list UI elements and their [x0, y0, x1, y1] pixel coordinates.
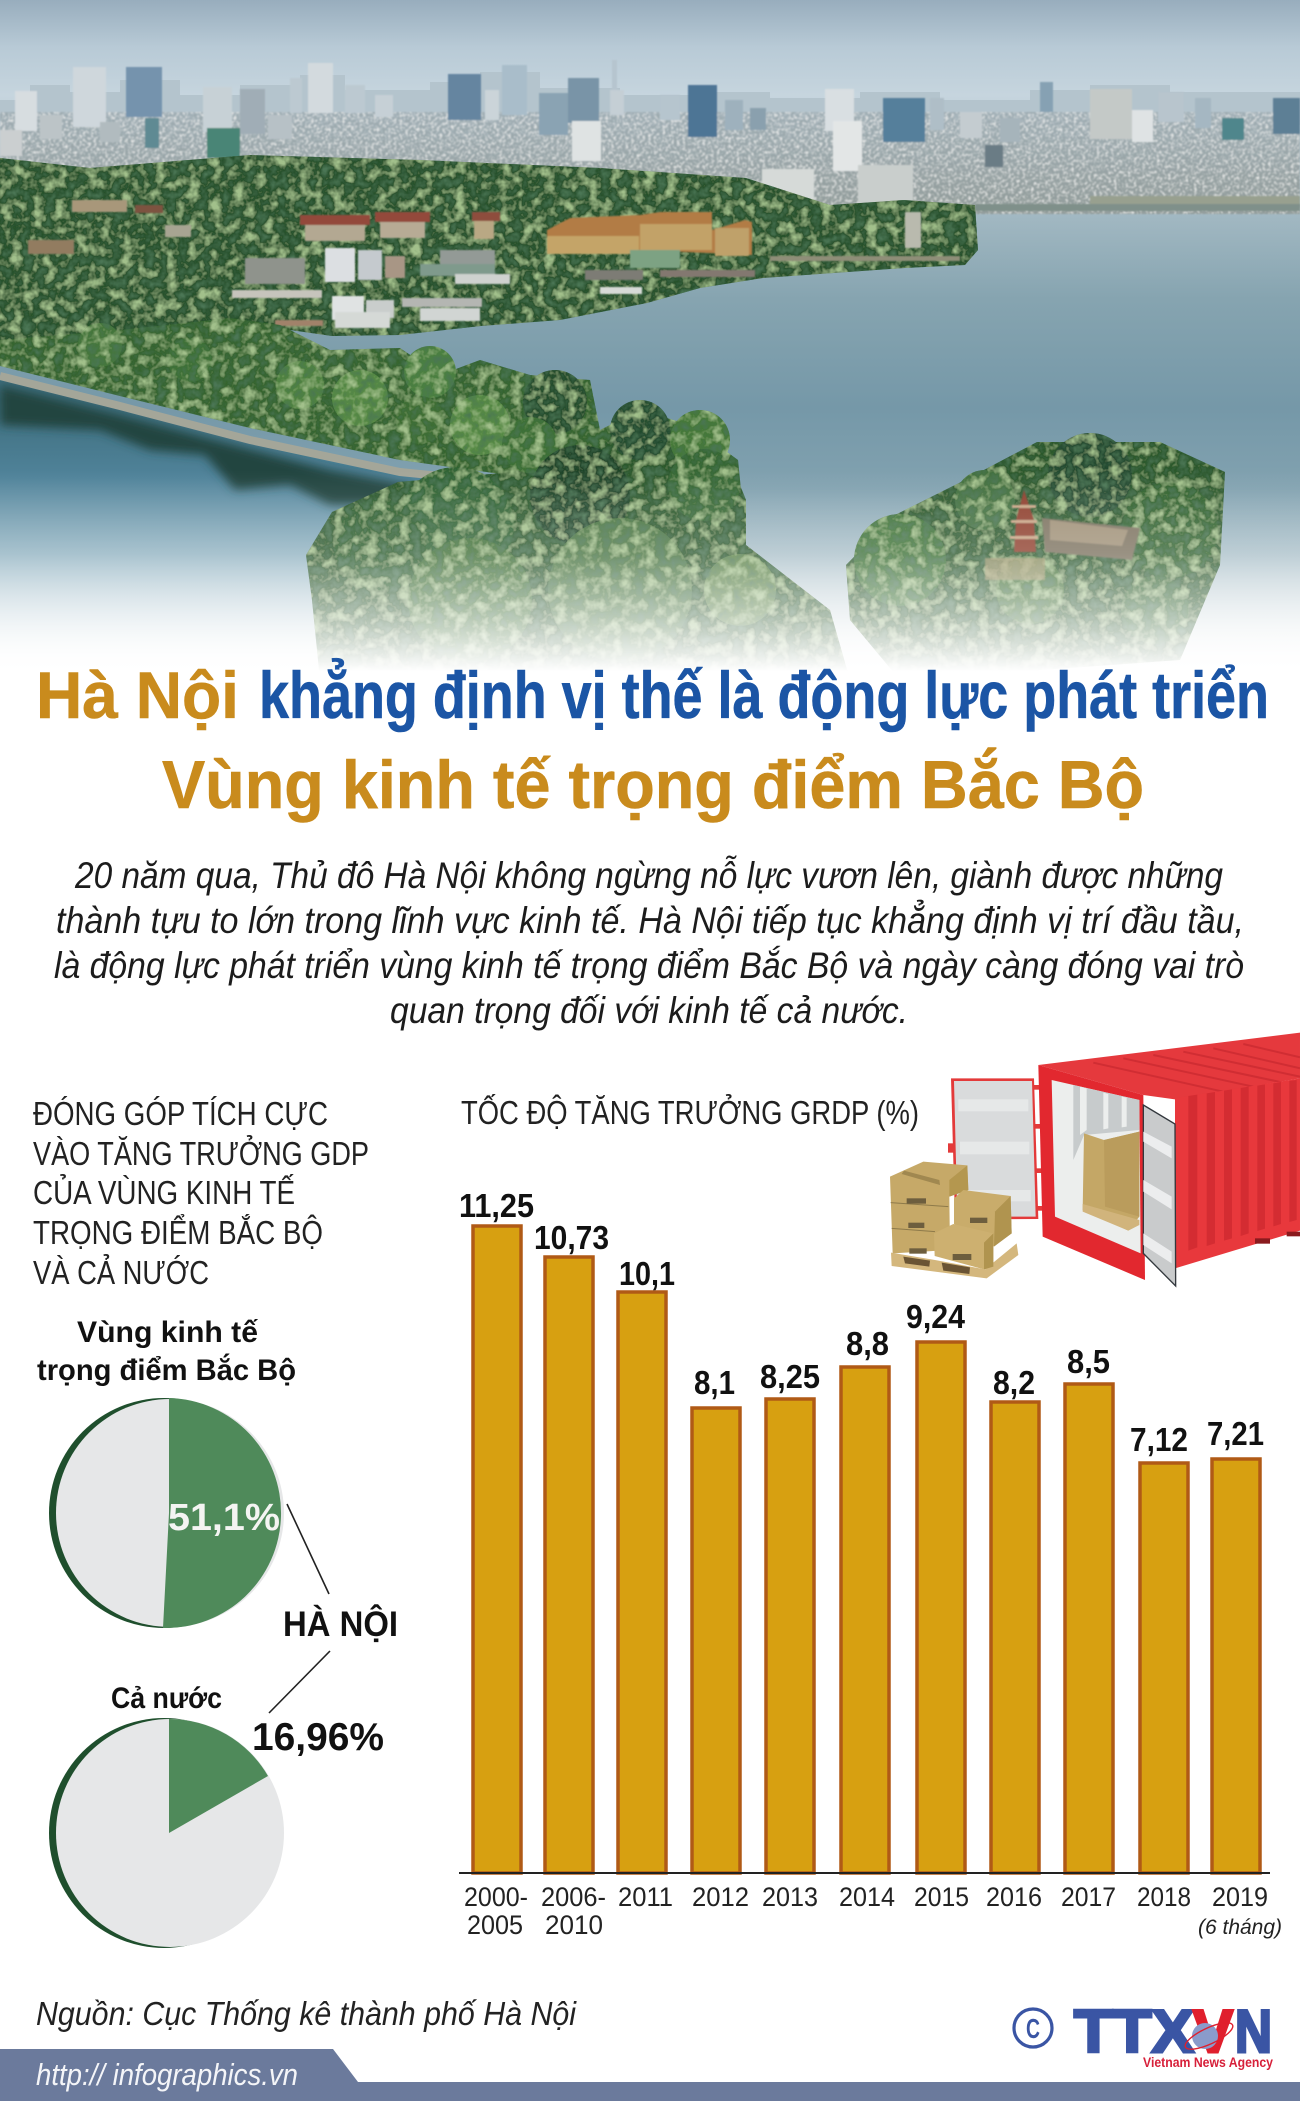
year labels [464, 1882, 1282, 1940]
bar values: 9,24 [906, 1298, 966, 1335]
callout: Hanoi [269, 1504, 398, 1713]
bar values: 7,21 [1207, 1415, 1264, 1452]
year labels: 2012 [692, 1882, 749, 1912]
heading: GDP contribution: VÀ CẢ NƯỚC [33, 1254, 209, 1291]
year labels: 2005 [467, 1910, 523, 1940]
title line 2: Vùng kinh tế trọng điểm Bắc Bộ [162, 746, 1144, 823]
year labels: 2011 [618, 1882, 673, 1912]
intro paragraph: quan trọng đối với kinh tế cả nước. [390, 990, 908, 1031]
tree reflection in water [0, 385, 415, 520]
container front frame [1038, 1065, 1145, 1280]
heading: GDP contribution: TRỌNG ĐIỂM BẮC BỘ [33, 1214, 323, 1251]
bar values: 11,25 [459, 1187, 534, 1224]
pie label [37, 1316, 296, 1387]
icon: copyright [1014, 2009, 1052, 2047]
open right door [1143, 1105, 1176, 1286]
bar values: 8,25 [760, 1358, 820, 1395]
pie chart: whole country [49, 1682, 384, 1948]
bar values: 8,1 [694, 1364, 735, 1401]
causeway road [0, 372, 434, 478]
title [36, 657, 1269, 823]
year labels: 2016 [986, 1882, 1042, 1912]
white fade at the bottom of the photo [0, 470, 1300, 680]
hazy distant towers [0, 72, 1300, 112]
side wall ridges [1188, 1080, 1300, 1251]
year labels: (6 tháng) [1198, 1916, 1282, 1939]
pie body [49, 1398, 284, 1628]
icon: globe with orbit [1182, 2018, 1236, 2054]
heading: GDP contribution: CỦA VÙNG KINH TẾ [33, 1174, 295, 1211]
tagline: Vietnam News Agency [1143, 2054, 1273, 2070]
year labels: 2013 [762, 1882, 818, 1912]
pie label: trọng điểm Bắc Bộ [37, 1353, 296, 1387]
icon: copyright: C [1026, 2013, 1040, 2044]
year labels: 2014 [839, 1882, 895, 1912]
container interior [1052, 1080, 1141, 1253]
heading: GDP contribution [33, 1095, 369, 1291]
year labels: 2010 [545, 1910, 603, 1940]
forest on far bank [0, 155, 978, 360]
pallet of cardboard boxes [890, 1162, 1018, 1278]
intro paragraph [54, 855, 1244, 1031]
sky and lake backdrop [0, 0, 1300, 680]
pie label: Vùng kinh tế [77, 1316, 258, 1349]
source note: Nguồn: Cục Thống kê thành phố Hà Nội [36, 1995, 578, 2032]
wordmark: N [1235, 1998, 1272, 2065]
lake far shoreline [975, 204, 1300, 211]
callout: Hanoi: HÀ NỘI [283, 1604, 398, 1644]
photo: West Lake, Hanoi [0, 0, 1300, 680]
year labels: 2019 [1212, 1882, 1268, 1912]
year labels: 2000- [464, 1882, 528, 1912]
footer bar [0, 2049, 1300, 2101]
year labels: 2018 [1137, 1882, 1191, 1912]
title line 1: Hà Nội [36, 658, 239, 732]
wordmark: TTX [1074, 1998, 1194, 2065]
heading: GRDP growth: TỐC ĐỘ TĂNG TRƯỞNG GRDP (%) [461, 1093, 919, 1131]
tree-lined peninsula and island [0, 318, 850, 680]
bar values: 10,73 [534, 1219, 609, 1256]
wordmark [1074, 1998, 1272, 2065]
container roof [1038, 1033, 1300, 1099]
temple island [846, 433, 1225, 680]
bars [473, 1226, 1260, 1873]
wordmark: V [1193, 1998, 1233, 2065]
pagoda and temple [985, 490, 1140, 580]
container side wall [1175, 1078, 1300, 1268]
pie chart: key economic region [37, 1316, 296, 1628]
year labels: 2015 [914, 1882, 969, 1912]
bar values: 10,1 [619, 1255, 675, 1292]
bar values: 7,12 [1130, 1421, 1188, 1458]
year labels: 2006- [541, 1882, 606, 1912]
roof ridges [1093, 1044, 1300, 1092]
bar values [459, 1187, 1264, 1458]
bar values: 8,8 [846, 1325, 889, 1362]
year labels: 2017 [1061, 1882, 1116, 1912]
pie body [49, 1718, 284, 1948]
pie label: Cả nước [111, 1682, 222, 1715]
container and boxes picture [890, 1033, 1300, 1286]
pie value: 51,1% [168, 1497, 280, 1539]
lakeside buildings [28, 200, 960, 328]
axis line [459, 1872, 1270, 1874]
pie value: 16,96% [252, 1716, 384, 1759]
heading: GDP contribution: VÀO TĂNG TRƯỞNG GDP [33, 1135, 369, 1172]
open left door [948, 1078, 1045, 1219]
bar values: 8,5 [1067, 1343, 1110, 1380]
footer url: http:// infographics.vn [36, 2057, 298, 2092]
heading: GDP contribution: ĐÓNG GÓP TÍCH CỰC [33, 1095, 328, 1132]
logo: TTXVN [1014, 1998, 1273, 2070]
left lake below causeway [0, 380, 422, 606]
bar values: 8,2 [993, 1364, 1035, 1401]
bar chart: GRDP growth [459, 1187, 1282, 1940]
city skyline [0, 60, 1300, 214]
